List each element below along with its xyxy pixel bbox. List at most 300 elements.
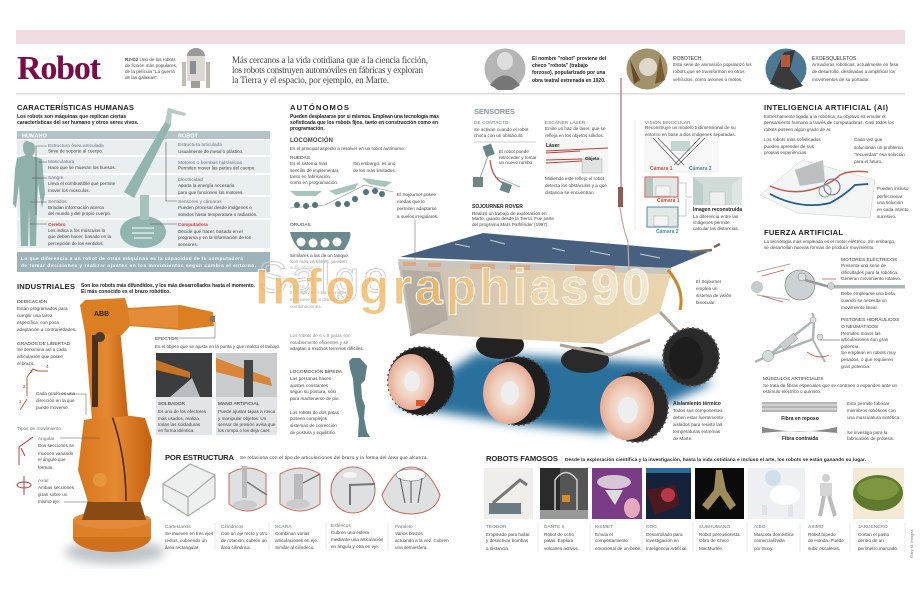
panel edge — [398, 259, 672, 274]
text: fibers: una musculatura sintética. — [847, 415, 900, 420]
text: Jardenero: Cortan el pasto — [858, 532, 890, 537]
icon: degrees of freedom: 2 — [23, 384, 26, 389]
text: human column: Musculatura — [48, 159, 74, 165]
text: patas description: adaptan a muchos terrenos difíciles. — [290, 346, 364, 351]
text: aislamiento térmico: deben estar fuertemente — [673, 415, 723, 420]
note: Robotech — [673, 56, 752, 82]
text: Kismet: KISMET — [595, 524, 613, 530]
text: aislamiento térmico: de Marte. — [673, 436, 692, 441]
R2-D2 note: de las galaxias". — [125, 75, 158, 80]
text: fibers: miembros robóticos con — [847, 408, 896, 413]
text: fibers: Esto permite fabricar — [847, 401, 890, 406]
text: sojourner rover — [472, 204, 554, 227]
panel: robots famosos — [484, 454, 914, 558]
text: axial: Ambas secciones — [38, 485, 75, 490]
text: escáner láser — [545, 119, 606, 138]
text: aislamiento térmico — [673, 401, 723, 441]
text: motores eléctricos: dificultades para la robótica. — [841, 270, 898, 275]
diagram: binocular vision: Cámara 2 — [689, 166, 712, 172]
photo: Kismet — [592, 468, 642, 519]
text: human column: que deben hacer, basado en la — [48, 234, 112, 239]
wheel front left — [388, 347, 454, 415]
icon: esférico — [331, 467, 375, 513]
text: locomoción bípeda: ajustes constantes — [290, 383, 329, 388]
text: cartesianos: Cartesianos — [165, 524, 191, 530]
text: patas description: Los robots de 6 u 8 patas son — [290, 333, 351, 338]
wheel front right — [600, 372, 668, 442]
text: angular — [38, 436, 74, 470]
text: human column: Sirve de soporte al cuerpo. — [48, 148, 103, 154]
text: dolly: movimiento lineal. — [841, 305, 878, 310]
text: learning: pueden aprender de sus — [764, 144, 815, 149]
text: laser explanation — [545, 176, 607, 195]
photo panel: mano artificial: MANO ARTIFICIAL — [218, 401, 260, 407]
text: de contacto: choca con un obstáculo. — [474, 133, 524, 138]
note: Sojourner suspension — [397, 192, 438, 219]
text: paralelo: Varios brazos — [395, 531, 423, 536]
text: Aibo: Mascota doméstica — [754, 532, 794, 537]
photo: Jardenero — [853, 468, 904, 519]
lead: Desde la exploración científica y la investigación, hasta la vida cotidiana e incluso el arte, los robots se están ganando su lugar. — [565, 457, 866, 463]
note: exoskeletons: EXOESQUELETOS — [812, 56, 857, 62]
text: binocular note: binocular. — [696, 300, 716, 305]
text: patas description: notablemente eficientes y se — [290, 340, 349, 345]
text: human column: Sangre — [48, 175, 64, 181]
photo panel: mano artificial: los rompa o los deja caer. — [218, 428, 270, 433]
text: binocular note: emplea un — [696, 286, 718, 291]
text: esféricos: Esféricos — [331, 523, 351, 529]
icon: contact sensor — [473, 142, 537, 193]
text: robot column: Electricidad — [178, 177, 203, 183]
text: pistones: potencia. — [841, 344, 860, 349]
text: laser explanation: detecta los obstáculos y a qué — [545, 183, 607, 188]
brick band — [403, 262, 615, 271]
text: imagen reconstruida: calcular las distancias. — [693, 226, 739, 231]
text: paralelo — [395, 524, 449, 550]
intro text: los robots construyen automóviles en fábricas y exploran — [232, 65, 423, 75]
text: aislamiento térmico: temperaturas extremas — [673, 429, 721, 434]
photo: Aibo — [748, 468, 805, 519]
text: cilíndricos: Cilíndricos — [221, 524, 244, 530]
portrait: Robotech — [626, 48, 668, 90]
note: origin of the word robot: forzoso), popularizado por una — [532, 70, 606, 76]
diagram: contracted fiber — [762, 427, 837, 433]
heading: POR ESTRUCTURA — [165, 453, 235, 462]
text: human column: percepción de los sentidos. — [48, 241, 104, 246]
header band — [16, 30, 905, 44]
panel: autónomos — [290, 103, 439, 437]
robot arm ABB — [73, 298, 215, 552]
text: pistones: pesados, o que requieren — [841, 357, 894, 362]
diagram: camera 2 view: Cámara 2 — [656, 229, 679, 235]
text: Aibo: por Sony. — [754, 546, 773, 551]
text: cartesianos — [165, 524, 214, 550]
text: ruedas: como en programación. — [290, 180, 338, 185]
text: human column: Lleva el combustible que permite — [48, 181, 116, 186]
R2-D2 note: de la película "La guerra — [125, 69, 175, 74]
text: locomoción bípeda: para mantenerse de pie. — [290, 396, 340, 401]
heading: FUERZA ARTIFICIAL — [764, 228, 843, 237]
text: aislamiento térmico: Todos sus componentes — [673, 408, 723, 413]
text: pistones: Se emplean en robots muy — [841, 350, 897, 355]
connector lines — [30, 142, 177, 224]
label: Fibra contraída — [782, 436, 818, 442]
lead: programación. — [290, 126, 325, 132]
text: orugas description: Similares a las de un tanque. — [290, 253, 349, 258]
text: angular: forman. — [38, 465, 54, 470]
lead: Los robots son máquinas que replican ciertas — [17, 114, 126, 120]
text: cada grado: dirección en la que — [36, 398, 75, 403]
icon: SCARA — [280, 468, 320, 511]
note: perfect: sucesivo. — [877, 214, 896, 219]
text: binocular note: sistema de visión — [696, 293, 732, 298]
lead: sofisticada que los robots fijos, tanto en construcción como en — [290, 120, 438, 126]
rover left mechanism — [402, 270, 448, 332]
title: Robot — [17, 50, 102, 87]
photo panel: soldador: en forma idéntica. — [158, 428, 195, 433]
text: Dante II: patas. Explora — [544, 538, 574, 543]
note: Sojourner suspension: a suelos irregulares. — [397, 214, 438, 219]
text: aislamiento térmico: Aislamiento térmico — [673, 401, 721, 407]
text: de contacto — [474, 120, 529, 138]
text: axial: mismo eje. — [38, 499, 60, 504]
note: Sojourner suspension: El Sojourner posee — [397, 192, 437, 197]
text: motores eléctricos — [841, 256, 901, 281]
intro text: la Tierra y el espacio, por ejemplo, en Marte. — [232, 75, 389, 85]
text: músculos artificiales — [763, 375, 898, 394]
note: exoskeletons: de desarrollo, destinadas a amplificar los — [812, 69, 896, 74]
text: binocular note: El Sojourner — [696, 279, 722, 284]
text: learning: Los robots más sofisticados — [764, 137, 821, 142]
text: Aibo: comercializada — [754, 538, 785, 543]
icon: caterpillar track — [290, 232, 350, 250]
panel: por estructura — [163, 453, 449, 550]
text: Teodor: y desactivar bombas — [486, 538, 529, 543]
text: motores eléctricos: MOTORES ELÉCTRICOS — [841, 256, 897, 263]
text: sojourner rover: Marte, guiado desde la Tierra. Fue parte — [472, 216, 554, 221]
text: robot column — [178, 142, 257, 247]
panel: fuerza artificial — [751, 228, 905, 442]
photo: Dante II — [540, 468, 588, 519]
text: Dante II: Robot de ocho — [544, 532, 574, 537]
text: Teodor: Empleado para hallar — [486, 532, 530, 537]
note: origin of the word robot — [532, 56, 607, 84]
pointer — [414, 220, 416, 265]
text: Jardenero: perímetro marcado. — [858, 546, 898, 551]
text: Subhumano: SUBHUMANO — [699, 524, 730, 530]
panel: inteligencia artificial — [760, 103, 909, 219]
text: orugas description: subir escaleras. — [290, 265, 322, 270]
text: pensamiento humano a través de computadoras. Casi todos los — [764, 120, 895, 125]
text: robots poseen algún grado de AI. — [764, 127, 832, 132]
text: pistones: articulaciones con gran — [841, 337, 889, 342]
text: Jardenero: JARDENERO — [858, 524, 888, 530]
text: escáner láser: ESCÁNER LÁSER — [545, 119, 586, 126]
lead: características del ser humano y otros seres vivos. — [17, 120, 139, 126]
text: cada grado: puede moverse. — [36, 405, 69, 410]
photo panel: mano artificial: Puede ajustar tapas a rosca — [218, 409, 276, 414]
photo panel: mano artificial: y manipular objetos. Un — [218, 416, 267, 421]
lead — [81, 283, 256, 295]
lead — [17, 114, 139, 126]
text: angular: Dos secciones se — [38, 443, 74, 448]
text: Asimo: de Honda. Puede — [808, 538, 844, 543]
text: human column: Les indica a los músculos lo — [48, 228, 106, 233]
photo: Cog — [646, 468, 691, 519]
text: robot column: Permiten mover las partes del cuerpo. — [178, 166, 256, 170]
text: músculos artificiales: Se trata de fibras especiales que se contraen o expanden ante un — [763, 383, 898, 388]
text: remembering — [854, 137, 905, 164]
text: fibers — [847, 401, 900, 420]
R2-D2 note — [125, 57, 177, 80]
heading: CARACTERÍSTICAS HUMANAS — [17, 103, 134, 112]
right electronics — [668, 270, 681, 310]
text: de contacto: Se activan cuando el robot — [474, 127, 529, 132]
text: Dante II: volcanes activos. — [544, 546, 579, 551]
text: grados de libertad — [17, 341, 71, 366]
text: pistones: gran potencia. — [841, 364, 870, 369]
text: Teodor: TEODOR — [486, 524, 507, 530]
text: dolly — [841, 291, 895, 310]
text: patas: se mueven con distintas — [290, 297, 340, 302]
text: human column: Hace que se muevan los huesos. — [48, 165, 116, 170]
text: robot column: Usualmente de metal o plástico. — [178, 149, 243, 154]
text: Cog: Desarrollado para — [646, 532, 683, 537]
text: orugas description — [290, 253, 349, 270]
icon: contact sensor: El robot puede — [499, 149, 529, 154]
text: dedicación: específica, con poca — [17, 320, 59, 325]
note: Robotech: robots que se transforman en otros — [673, 69, 745, 74]
text: human column: mover los músculos. — [48, 188, 90, 193]
note: Sojourner suspension: permiten adaptarse — [397, 206, 437, 211]
R2-D2 note: R2-D2 Uno de los robots — [125, 57, 176, 62]
text: se desarrollan nuevas formas de producir movimiento. — [764, 245, 875, 250]
icon: robot arm schematic — [120, 108, 186, 248]
text: Kismet: emocional de un bebé. — [595, 546, 641, 551]
diagram: camera 1 view: Cámara 1 — [657, 198, 680, 204]
text: patas — [290, 284, 350, 309]
text: human column: del mundo y del propio cuerpo. — [48, 211, 111, 216]
text: Es el principal aspecto a resolver en un robot autónomo. — [290, 146, 405, 151]
text: human column: Sentidos — [48, 199, 67, 205]
text: limitation: Sin embargo, es uno — [353, 161, 396, 166]
note: exoskeletons — [812, 56, 899, 82]
text: dedicación — [17, 298, 76, 332]
text: efector: EFECTOR — [155, 336, 178, 342]
text: locomoción bípeda: según su postura, sólo — [290, 389, 337, 394]
text: prosthetics: Se investiga para la — [847, 430, 888, 435]
text: Cog: investigación en — [646, 538, 679, 543]
text: grados de libertad: Se denomina así a cada — [17, 347, 67, 352]
text: ruedas: RUEDAS — [290, 155, 310, 161]
text: remembering: "recuerdan" esa solución — [854, 152, 905, 157]
text: Subhumano: Robot percusionista. — [699, 532, 741, 537]
text: imagen reconstruida: Imagen reconstruida — [693, 207, 742, 213]
text: pistones: O NEUMÁTICOS — [841, 323, 878, 330]
diagram: fiber at rest — [762, 402, 837, 412]
text: Subhumano — [699, 524, 741, 551]
text: imagen reconstruida — [693, 207, 742, 231]
note: origin of the word robot: El nombre "robot" proviene del — [532, 56, 607, 62]
text: axial: Axial — [38, 478, 48, 484]
column header: robot: ROBOT — [178, 134, 198, 140]
text: imagen reconstruida: imágenes permite — [693, 220, 730, 225]
rover body — [398, 262, 672, 344]
text: prosthetics: fabricación de prótesis. — [847, 436, 894, 441]
diagram: laser scanner — [545, 140, 608, 173]
note: Robotech: ROBOTECH — [673, 56, 702, 62]
text: cartesianos: Se mueven en tres ejes — [165, 531, 214, 536]
text: cilíndricos: área cilíndrica. — [221, 545, 251, 550]
heading: INDUSTRIALES — [17, 282, 75, 291]
text: Teodor: a distancia. — [486, 546, 509, 551]
text: robot column: sonidos hasta temperatura o radiación. — [178, 212, 257, 217]
lead: Pueden desplazarse por sí mismos. Emplean una tecnología más — [290, 114, 439, 120]
text: grados de libertad: articulación que posee — [17, 354, 63, 359]
text: sojourner rover: del programa Mars Pathfinder (1997). — [472, 222, 549, 227]
note: Sojourner suspension: ruedas que le — [397, 199, 425, 204]
icon: cartesiano — [163, 464, 215, 516]
text: locomoción bípeda: sistemas de corrección — [290, 423, 337, 428]
text: motores eléctricos: Generan movimiento rotativo. — [841, 276, 901, 281]
text: ruedas — [290, 155, 339, 185]
text: axial — [38, 478, 75, 504]
text: SCARA: SCARA — [275, 524, 292, 530]
text: Teodor — [486, 524, 530, 551]
text: axial: giran sobre un — [38, 492, 68, 497]
text: motores eléctricos: Presenta una serie de — [841, 263, 886, 268]
label: Fibra en reposo — [781, 416, 819, 422]
text: dedicación: DEDICACIÓN — [17, 298, 48, 305]
icon: degrees of freedom: 3 — [30, 369, 33, 374]
connector lines — [60, 322, 215, 502]
callout — [17, 252, 270, 272]
text: paralelo: Paralelo — [395, 524, 413, 530]
panel: características humanas — [13, 103, 270, 272]
column header: humano: HUMANO — [22, 134, 47, 140]
text: Cog: COG — [646, 524, 657, 530]
icon: paralelo — [382, 467, 440, 514]
text: tipos de movimiento: Tipos de movimiento — [17, 426, 61, 432]
diagram: laser scanner: Objeto — [585, 156, 600, 161]
comparison table background — [17, 131, 270, 248]
text: Asimo: Robot bípedo — [808, 532, 836, 537]
text: cartesianos: rectos, cubriendo un — [165, 538, 207, 543]
portrait: exoskeleton — [766, 48, 806, 90]
wheel front middle — [483, 357, 550, 425]
text: dolly: cuando se necesita un — [841, 298, 887, 303]
note: perfect: perfeccionar — [877, 194, 903, 199]
note: Robotech: vehículos, como aviones o motos. — [673, 77, 742, 82]
photo: Asimo — [808, 468, 850, 519]
note: perfect: en cada intento — [877, 207, 909, 212]
text: Jardenero: dentro de un — [858, 538, 884, 543]
heading: INTELIGENCIA ARTIFICIAL (AI) — [764, 103, 888, 112]
text: locomoción bípeda: Los robots de dos patas — [290, 410, 340, 415]
icon: biped robot — [349, 358, 370, 437]
rover mechanism — [410, 312, 682, 355]
wheel rear right — [663, 328, 719, 386]
text: esféricos: en ángulo y otra en eje. — [331, 544, 379, 549]
diagram: electric motor — [751, 264, 905, 302]
text: remembering: solucionan un problema — [854, 145, 903, 150]
text: cilíndricos — [221, 524, 268, 550]
text: patas: Se inspiran en los animales y — [290, 290, 350, 295]
text: de contacto: DE CONTACTO — [474, 120, 509, 126]
icon: rover on terrain — [290, 178, 393, 209]
text: cada grado: Cada grado es una — [36, 391, 76, 396]
panel: sensores — [472, 107, 742, 235]
text: robot column: Pueden procesar desde imágenes o — [178, 205, 252, 210]
photo: Subhumano — [695, 468, 744, 519]
text: grados de libertad: GRADOS DE LIBERTAD — [17, 341, 71, 347]
icon: degrees of freedom: 1 — [19, 399, 22, 404]
heading: ROBOTS FAMOSOS — [486, 454, 558, 463]
text: locomoción bípeda: LOCOMOCIÓN BÍPEDA — [290, 368, 343, 375]
text: robot column: Motores o bombas hidráulicas — [178, 160, 243, 166]
diagram: laser scanner: Láser — [546, 143, 559, 149]
robot arm shadow — [65, 540, 165, 564]
text: patas: PATAS — [290, 284, 305, 290]
photo panel: mano artificial: sensor de presión avisa que — [218, 422, 276, 427]
panel highlights — [455, 240, 660, 258]
text: cartesianos: área rectangular. — [165, 545, 199, 550]
text: orugas description: Son más versátiles, pueden — [290, 259, 347, 264]
icon: degrees of freedom — [19, 364, 49, 410]
text: Cog: Inteligencia Artificial. — [646, 546, 688, 551]
text: grados de libertad: el brazo. — [17, 361, 35, 366]
text: human column: Estructura ósea articulada — [48, 143, 104, 149]
photo panel: mano artificial — [216, 353, 277, 435]
text: dedicación: cumplir una tarea — [17, 313, 53, 318]
lead: El más conocido es el brazo robótico. — [81, 289, 171, 295]
lead: Son los robots más difundidos, y los más desarrollados hasta el momento. — [81, 283, 256, 289]
text: ruedas: sencillo de implementar, — [290, 168, 339, 173]
text — [764, 114, 895, 132]
text: SCARA: Similar al cilíndrico. — [275, 545, 315, 550]
diagram: camera 1 view — [645, 177, 680, 204]
text: prosthetics — [847, 430, 894, 441]
text: ruedas: Es el sistema más — [290, 161, 328, 166]
text: Asimo — [808, 524, 844, 551]
icon: cilíndrico — [229, 466, 267, 511]
lead — [290, 114, 439, 132]
text: sojourner rover: SOJOURNER ROVER — [472, 204, 523, 210]
text: Dante II — [544, 524, 579, 551]
text: robot column: Decide qué hacer, basada en el — [178, 229, 243, 234]
text: human column: Brindan información acerca — [48, 205, 104, 210]
rover solar panel — [400, 233, 708, 268]
diagram: reconstructed image — [693, 177, 742, 205]
text: locomoción bípeda — [290, 368, 343, 435]
intro text — [232, 55, 428, 85]
icon: axial movement — [17, 476, 31, 495]
text: locomoción bípeda: de postura y equilibrio. — [290, 430, 336, 435]
icon: human silhouette — [13, 141, 45, 246]
text: imagen reconstruida: La diferencia entre las — [693, 214, 739, 219]
text: esféricos — [331, 523, 384, 549]
text: credit: Gary M. Images — [909, 530, 914, 558]
text: músculos artificiales: MÚSCULOS ARTIFICIALES — [763, 375, 823, 382]
watermark: Salgo — [258, 253, 388, 302]
photo panel: soldador: todas las soldaduras — [158, 422, 201, 427]
text: Jardenero — [858, 524, 898, 551]
text: robot column: sensores. — [178, 242, 198, 247]
heading: SENSORES — [474, 107, 515, 116]
text: patas: combinaciones. — [290, 304, 322, 309]
text: laser explanation: distancia se encuentran. — [545, 190, 595, 195]
text: paralelo: una semiesfera. — [395, 545, 428, 550]
